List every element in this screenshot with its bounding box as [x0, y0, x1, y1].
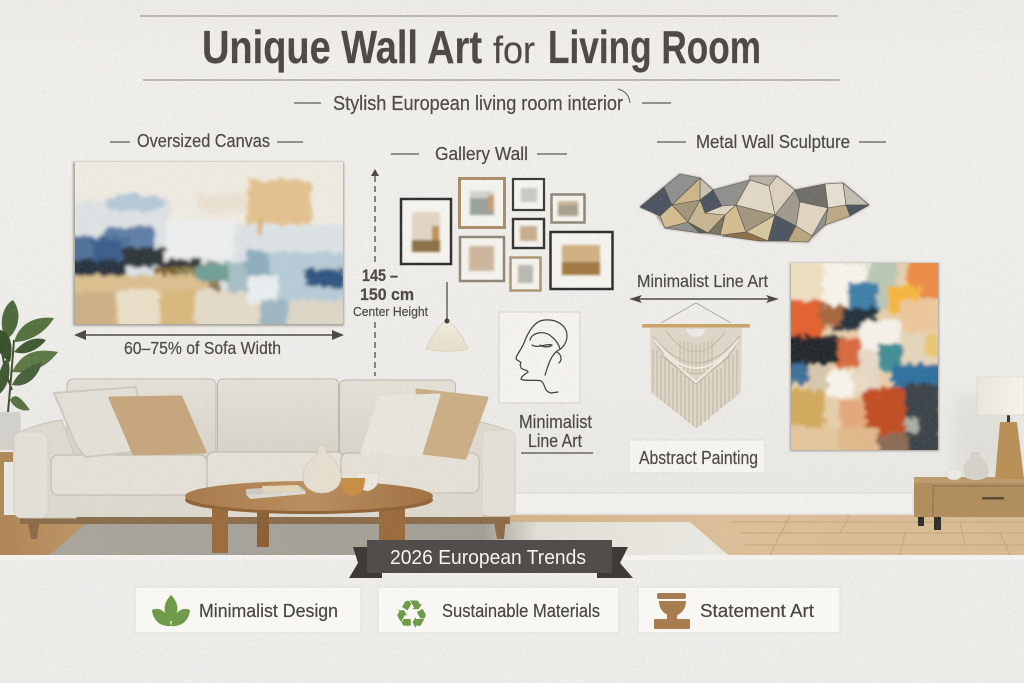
seat cushions	[51, 452, 479, 495]
label: center height: Center Height	[353, 304, 428, 319]
bottom band	[0, 555, 1024, 683]
trend card: minimalist design: Minimalist Design	[199, 601, 338, 621]
ribbon: 2026 European Trends	[349, 540, 633, 578]
label: minimalist line art, right: Minimalist Line Art	[637, 271, 768, 291]
baseboard	[515, 493, 913, 514]
abstract painting	[785, 258, 943, 454]
icon: recycle: ♻	[394, 593, 429, 638]
arrow: line art width	[629, 295, 779, 303]
bowl	[355, 473, 379, 491]
label: abstract painting	[629, 440, 765, 473]
coffee table	[185, 481, 433, 553]
title block	[140, 16, 840, 80]
frame 2	[460, 178, 504, 228]
back cushions	[67, 379, 456, 457]
ceramic vases	[946, 452, 989, 480]
arrow: canvas width	[74, 330, 344, 340]
label: gallery wall: Gallery Wall	[435, 144, 528, 164]
lamp wall shadow	[955, 395, 1015, 475]
books	[246, 485, 306, 499]
arm fronts	[14, 430, 515, 518]
title block: Living Room	[548, 21, 761, 73]
arrow: center height	[371, 169, 379, 376]
side table	[0, 452, 13, 536]
vase	[303, 446, 341, 493]
trend card: sustainable materials	[378, 587, 619, 638]
label: minimalist line art, left	[519, 412, 593, 453]
label: minimalist line art, left: Minimalist	[519, 412, 592, 432]
pendant lamp	[426, 282, 468, 352]
icon: leaves	[152, 595, 190, 626]
right arm	[462, 420, 515, 516]
frame 7	[510, 258, 540, 290]
framed line art: face	[499, 312, 580, 403]
tabletop decor	[246, 446, 379, 499]
left arm	[14, 420, 76, 518]
amber cup	[341, 478, 365, 496]
frame 5	[513, 219, 544, 248]
trend card: statement art	[638, 587, 840, 633]
rug	[50, 522, 728, 555]
frame 6	[460, 237, 504, 281]
sofa legs	[27, 517, 506, 539]
base	[48, 494, 482, 517]
label: center height	[353, 266, 428, 319]
trend card: statement art: Statement Art	[700, 601, 814, 621]
label: abstract painting: Abstract Painting	[639, 448, 758, 468]
sofa	[14, 379, 515, 539]
ribbon: 2026 European Trends: 2026 European Trends	[390, 547, 586, 569]
painting: oversized abstract canvas	[72, 160, 346, 328]
subtitle: Stylish European living room interior	[333, 93, 623, 115]
label: sofa width: 60–75% of Sofa Width	[124, 338, 281, 358]
label: center height: 145 –	[362, 266, 398, 285]
gallery wall frames	[401, 178, 612, 290]
macrame wall hanging	[642, 303, 750, 428]
trend card: minimalist design	[135, 587, 361, 633]
sideboard	[914, 477, 1024, 530]
label: metal wall sculpture: Metal Wall Sculpture	[696, 132, 850, 152]
title block: Unique Wall Art	[202, 21, 482, 73]
frame 4	[552, 194, 584, 222]
label: oversized canvas: Oversized Canvas	[137, 131, 270, 151]
frame 3	[513, 179, 544, 210]
band highlight	[0, 555, 1024, 560]
icon: sculpture pedestal	[654, 593, 690, 629]
table lamp	[977, 377, 1024, 479]
potted plant	[0, 300, 58, 450]
sofa shadow	[20, 517, 510, 524]
frame 8	[550, 232, 612, 289]
trend card: sustainable materials: Sustainable Materials	[442, 601, 600, 621]
title block: for	[493, 30, 535, 72]
frame 1	[401, 199, 451, 264]
floor	[0, 515, 1024, 557]
label: minimalist line art, left: Line Art	[528, 431, 582, 451]
label: center height: 150 cm	[360, 285, 414, 304]
metal wall sculpture	[640, 174, 869, 242]
pillows	[54, 387, 487, 458]
